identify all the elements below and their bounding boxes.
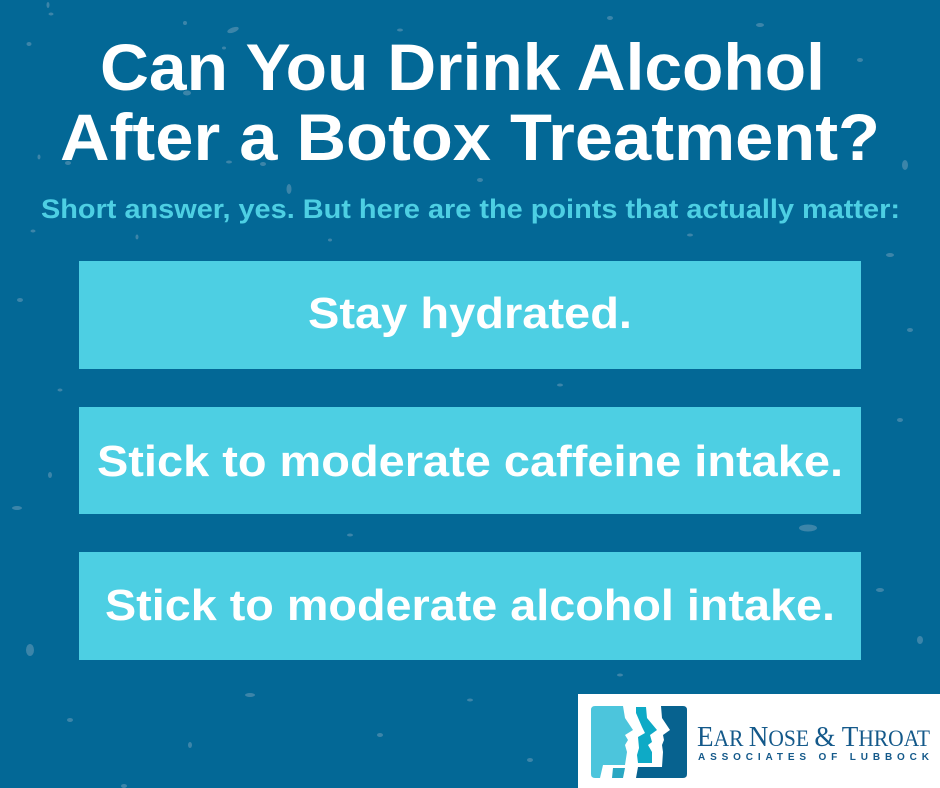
logo wordmark: EAR NOSE & THROAT bbox=[697, 721, 930, 753]
title bbox=[60, 30, 880, 174]
panel: stay hydrated: Stay hydrated. bbox=[308, 289, 632, 338]
logo tagline: ASSOCIATES OF LUBBOCK bbox=[698, 752, 930, 763]
panel: stay hydrated bbox=[79, 261, 861, 369]
panel: moderate caffeine: Stick to moderate caffeine intake. bbox=[97, 437, 843, 486]
title: Can You Drink Alcohol bbox=[100, 30, 825, 104]
subtitle: Short answer, yes. But here are the points that actually matter: bbox=[41, 194, 900, 224]
icon: three face profiles bbox=[591, 706, 687, 778]
logo bbox=[578, 694, 940, 788]
panel: moderate caffeine bbox=[79, 407, 861, 514]
panel: moderate alcohol bbox=[79, 552, 861, 660]
title: After a Botox Treatment? bbox=[60, 100, 880, 174]
panel: moderate alcohol: Stick to moderate alcohol intake. bbox=[105, 581, 835, 630]
